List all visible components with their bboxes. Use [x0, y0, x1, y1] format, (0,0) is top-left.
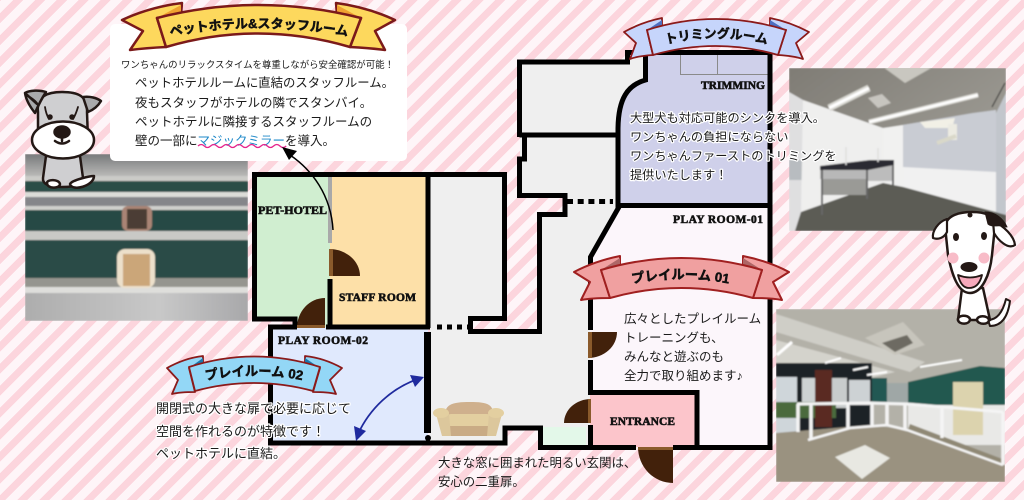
ribbon: play room 02: プレイルーム 02: [205, 364, 303, 380]
door: play room 01: [588, 332, 617, 358]
text: entrance description: 安心の二重扉。: [438, 475, 525, 489]
ribbon: pet hotel and staff room: ペットホテル&スタッフルーム: [170, 17, 348, 36]
text: play room 01 description: トレーニングも、: [624, 331, 724, 345]
room: common grey area: [430, 53, 646, 447]
door: staff room: [329, 249, 360, 276]
text: pet hotel description: [135, 75, 394, 148]
panel: pet hotel and staff room text: [110, 24, 407, 161]
text: entrance description: [438, 456, 636, 489]
walls: [254, 52, 770, 448]
text: entrance description: 大きな窓に囲まれた明るい玄関は、: [438, 456, 636, 470]
text: play room 02 description: 空間を作れるのが特徴です！: [156, 424, 325, 439]
room labels: PLAY ROOM-02: [278, 335, 368, 347]
ribbon: trimming room: [623, 17, 810, 60]
room: pet hotel: [255, 175, 330, 327]
ribbon: pet hotel and staff room: [120, 2, 396, 52]
ribbon: play room 02: [166, 355, 343, 395]
text: play room 01 description: みんなと遊ぶのも: [624, 349, 724, 364]
text: trimming description: 提供いたします！: [630, 167, 728, 182]
room labels: TRIMMING: [701, 80, 765, 92]
room: entrance: [590, 393, 697, 447]
partition: magic mirror: [328, 177, 332, 243]
room: staff room: [330, 175, 428, 327]
text: trimming description: [630, 111, 837, 182]
ribbon: trimming room: トリミングルーム: [667, 26, 767, 44]
text: play room 01 description: 広々としたプレイルーム: [624, 312, 761, 326]
text: trimming description: ワンちゃんファーストのトリミングを: [630, 149, 837, 163]
room labels: ENTRANCE: [610, 416, 675, 428]
text: play room 01 description: 全力で取り組めます♪: [624, 369, 743, 383]
room labels: STAFF ROOM: [339, 292, 416, 304]
icon: schnauzer dog: [25, 91, 101, 188]
text: play room 02 description: ペットホテルに直結。: [156, 446, 286, 461]
arrow: magic mirror: [282, 147, 333, 230]
room: trimming: [618, 53, 770, 205]
sink outline lines: [680, 55, 768, 74]
room labels: [258, 80, 765, 428]
photo: trimming room: [789, 67, 1006, 231]
room: play room 02: [271, 327, 428, 443]
text: play room 02 description: 開閉式の大きな扉で必要に応じて: [156, 401, 351, 416]
text: pet hotel description: 壁の一部にマジックミラーを導入。: [135, 133, 335, 148]
photo: play room: [776, 309, 1005, 482]
photo: pet hotel cages: [25, 154, 248, 321]
text: trimming description: 大型犬も対応可能のシンクを導入。: [630, 111, 825, 125]
arrow: sliding door: [354, 375, 424, 441]
door: pet hotel: [297, 298, 325, 328]
door: entrance outer: [638, 447, 673, 483]
icon: sofa: [433, 402, 504, 436]
ribbon: play room 01: [573, 255, 790, 301]
text: pet hotel description: 夜もスタッフがホテルの隣でスタンバイ。: [135, 95, 372, 110]
text: pet hotel description: ペットホテルに隣接するスタッフルームの: [135, 114, 372, 129]
text: play room 02 description: [156, 401, 351, 461]
wavy underline: [198, 144, 286, 148]
text: pet hotel subtitle: ワンちゃんのリラックスタイムを尊重しながら安全確認が可能！: [121, 59, 394, 71]
room labels: PLAY ROOM-01: [673, 214, 763, 226]
ribbon: play room 01: プレイルーム 01: [632, 268, 729, 284]
floor plan: [254, 52, 770, 448]
text: trimming description: ワンちゃんの負担にならない: [630, 130, 788, 144]
text: play room 01 description: [624, 312, 761, 383]
room: play room 01: [590, 205, 770, 447]
room labels: PET-HOTEL: [258, 205, 327, 217]
window: [543, 427, 586, 445]
text: pet hotel description: ペットホテルルームに直結のスタッフルーム。: [135, 75, 394, 90]
door: entrance inner: [564, 399, 591, 423]
icon: dalmatian dog: [933, 212, 1015, 326]
